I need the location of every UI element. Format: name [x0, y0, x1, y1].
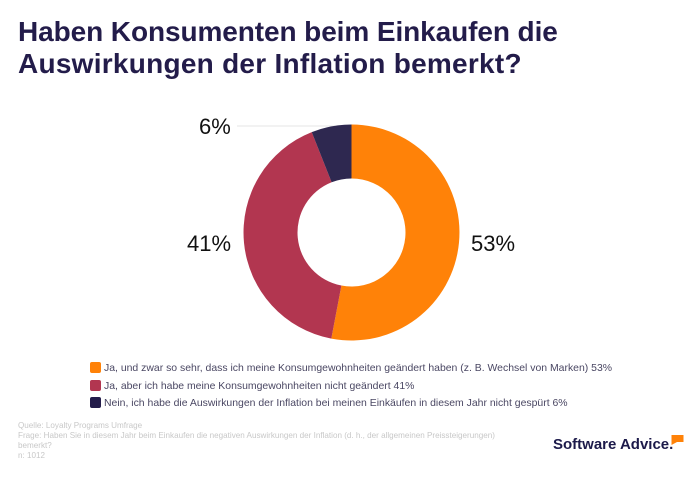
title [18, 16, 558, 79]
source note: bemerkt? [18, 441, 52, 450]
legend text 6%: Nein, ich habe die Auswirkungen der Inflation bei meinen Einkäufen in diesem Jahr nicht gespürt 6% [104, 398, 568, 409]
source note [18, 421, 495, 460]
legend swatch orange [90, 362, 101, 373]
source note: Frage: Haben Sie in diesem Jahr beim Einkaufen die negativen Auswirkungen der Inflation (d. h., der allgemeinen Preissteigerungen) [18, 431, 495, 440]
legend text 41%: Ja, aber ich habe meine Konsumgewohnheiten nicht geändert 41% [104, 381, 414, 392]
source note: Quelle: Loyalty Programs Umfrage [18, 421, 142, 430]
source note: n: 1012 [18, 451, 45, 460]
title: Haben Konsumenten beim Einkaufen die [18, 16, 558, 47]
icon: orange speech bubble [672, 435, 684, 445]
value label 53%: 53% [471, 231, 515, 256]
value label 6%: 6% [199, 114, 231, 139]
legend swatch navy [90, 397, 101, 408]
title: Auswirkungen der Inflation bemerkt? [18, 48, 522, 79]
legend text 53%: Ja, und zwar so sehr, dass ich meine Konsumgewohnheiten geändert haben (z. B. Wechsel von Marken) 53% [104, 363, 612, 374]
value label 41%: 41% [187, 231, 231, 256]
legend swatch red [90, 380, 101, 391]
logo: Software Advice: Software Advice. [553, 436, 673, 453]
